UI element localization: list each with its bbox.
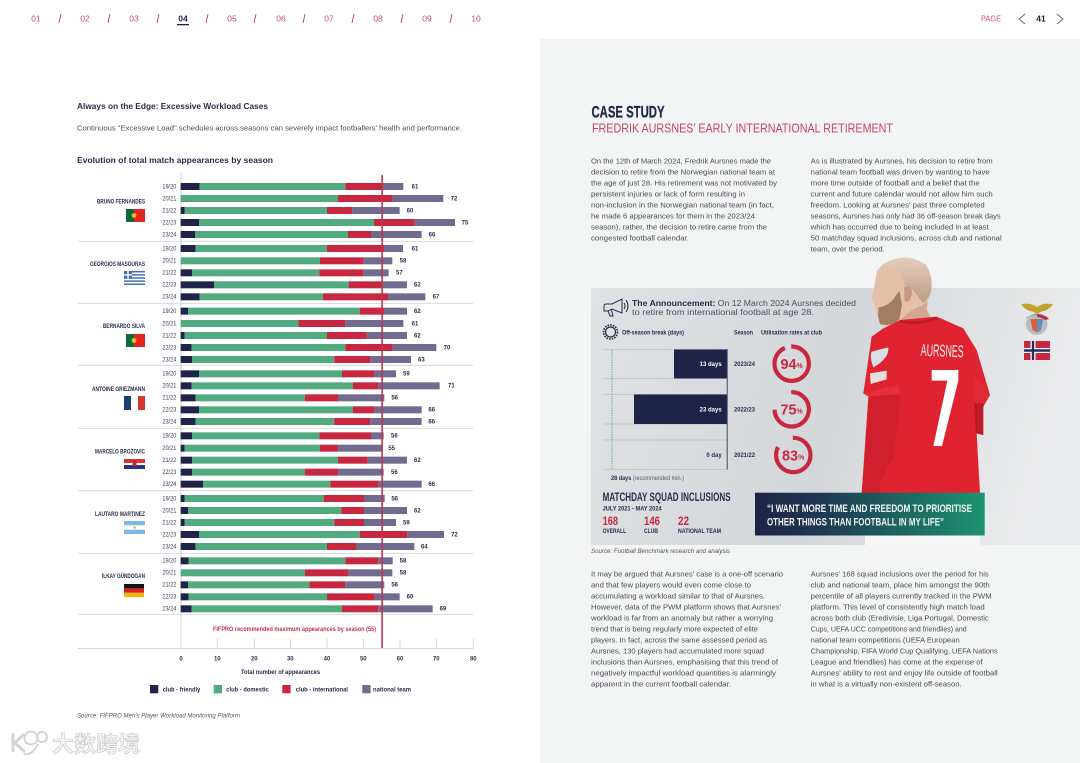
player bars: Lautaro Martinez: 62 bbox=[414, 508, 421, 514]
section navigation: 04 bbox=[178, 14, 188, 24]
player bars: Bernardo Silva: 63 bbox=[418, 357, 425, 363]
player bars: Marcelo Brozovic: 20/21 bbox=[162, 446, 177, 452]
text block: analysis column 1: trend that is being regularly more expected of elite bbox=[591, 625, 758, 634]
x axis labels: 80 bbox=[470, 656, 477, 662]
text block: analysis column 2: Aursnes' ability to rest and enjoy life outside of football bbox=[811, 669, 998, 678]
case study title: CASE STUDY bbox=[592, 103, 665, 122]
FIFPRO limit label: FIFPRO recommended maximum appearances by season (55) bbox=[213, 626, 376, 633]
announcement text: to retire from international football at age 28. bbox=[632, 307, 814, 317]
text block: intro column 1: decision to retire from the Norwegian national team at bbox=[591, 167, 775, 176]
player bars: Ilkay Gundogan: 23/24 bbox=[162, 607, 177, 613]
bars: all player seasons bbox=[162, 183, 469, 613]
player bars: Bruno Fernandes: 21/22 bbox=[162, 208, 177, 214]
player bars: Bruno Fernandes bbox=[162, 183, 469, 238]
player bars: Lautaro Martinez: 59 bbox=[403, 520, 410, 526]
text block: intro column 2: team, over the period. bbox=[811, 244, 885, 253]
bar chart: off-season break days: 13 days bbox=[700, 362, 722, 368]
player bars: Bernardo Silva: 22/23 bbox=[162, 345, 177, 351]
donut: 94% bbox=[774, 346, 809, 381]
player label: Ilkay Gundogan bbox=[102, 573, 145, 597]
player bars: Bernardo Silva: 62 bbox=[414, 309, 421, 315]
player bars: Bruno Fernandes: 60 bbox=[407, 208, 414, 214]
player bars: Marcelo Brozovic: 23/24 bbox=[162, 482, 177, 488]
text block: intro column 1: non-inclusion in the Norwegian national team (in fact, bbox=[591, 200, 774, 209]
watermark: 大数跨境 bbox=[52, 732, 140, 757]
player bars: Georgios Masouras: 61 bbox=[412, 246, 419, 252]
player bars: Antoine Griezmann: 56 bbox=[391, 396, 399, 402]
player label: Antoine Griezmann: ANTOINE GRIEZMANN bbox=[92, 387, 145, 393]
case study subtitle: FREDRIK AURSNES’ EARLY INTERNATIONAL RETIREMENT bbox=[592, 121, 893, 135]
player bars: Georgios Masouras: 22/23 bbox=[162, 283, 177, 289]
player bars: Lautaro Martinez: 56 bbox=[391, 496, 399, 502]
section navigation: 08 bbox=[373, 14, 383, 24]
legend: club - friendly bbox=[163, 686, 201, 693]
x axis labels: 40 bbox=[324, 656, 331, 662]
section navigation: 02 bbox=[80, 14, 90, 24]
player bars: Antoine Griezmann: 66 bbox=[428, 408, 436, 414]
donut: 83% bbox=[776, 438, 810, 472]
text block: intro column 1: season), rather, the decision to retire came from the bbox=[591, 222, 767, 231]
panel: the announcement bbox=[591, 258, 1080, 545]
panel: case study page background bbox=[540, 39, 1080, 763]
player bars: Lautaro Martinez: 22/23 bbox=[162, 532, 177, 538]
player bars: Georgios Masouras: 62 bbox=[414, 283, 421, 289]
text block: intro column 1: the age of just 28. His retirement was not motivated by bbox=[591, 178, 777, 187]
donut: 75%: % bbox=[796, 408, 804, 416]
player bars: Marcelo Brozovic: 21/22 bbox=[162, 458, 177, 464]
text block: analysis column 1: negatively impactful workload quantities is alarmingly bbox=[591, 669, 776, 678]
text block: analysis column 2: in what is a virtually non-existent off-season. bbox=[811, 680, 962, 689]
text block: intro column 2: current and future calendar would not allow him such bbox=[811, 189, 993, 198]
player label: Bruno Fernandes: BRUNO FERNANDES bbox=[97, 199, 145, 205]
player bars: Lautaro Martinez: 19/20 bbox=[162, 496, 177, 502]
player bars: Georgios Masouras: 20/21 bbox=[162, 259, 177, 265]
matchday squad inclusions: NATIONAL TEAM bbox=[678, 528, 721, 535]
legend: club - international bbox=[296, 686, 348, 693]
player label: Marcelo Brozovic: MARCELO BROZOVIC bbox=[95, 449, 146, 455]
recommended minimum note: 28 days (recommended min.) bbox=[611, 476, 684, 482]
text block: analysis column 1: Aursnes, 130 players had accumulated more squad bbox=[591, 647, 764, 656]
player label: Marcelo Brozovic bbox=[95, 449, 146, 469]
donut: 75%: 75 bbox=[780, 402, 796, 418]
text block: intro column 2: which has occurred due to being included in at least bbox=[810, 222, 989, 231]
player label: Bruno Fernandes bbox=[97, 199, 145, 222]
player bars: Ilkay Gundogan: 58 bbox=[400, 559, 407, 565]
player bars: Bruno Fernandes: 22/23 bbox=[162, 220, 177, 226]
text block: analysis column 1: However, data of the PWM platform shows that Aursnes' bbox=[591, 603, 782, 612]
text block: intro column 2: freedom. Looking at Aursnes' past three completed bbox=[811, 200, 985, 209]
player bars: Antoine Griezmann: 19/20 bbox=[162, 372, 177, 378]
x axis labels: 20 bbox=[251, 656, 258, 662]
matchday squad inclusions bbox=[603, 490, 731, 535]
donut: 75% bbox=[774, 392, 809, 426]
player bars: Bernardo Silva bbox=[162, 308, 451, 363]
text block: analysis column 1: workload is far from an anomaly but rather a worrying bbox=[590, 614, 773, 623]
matchday squad inclusions: JULY 2021 - MAY 2024 bbox=[603, 505, 662, 512]
donut: 83%: 83 bbox=[782, 448, 798, 464]
player bars: Ilkay Gundogan: 69 bbox=[440, 607, 447, 613]
page number bbox=[981, 14, 1063, 24]
player label: Bernardo Silva: BERNARDO SILVA bbox=[103, 324, 146, 330]
player bars: Lautaro Martinez: 64 bbox=[421, 544, 428, 550]
text block: intro column 2 bbox=[810, 156, 1002, 253]
column headers: Off-season break (days) bbox=[622, 330, 684, 336]
text block: intro column 2: As is illustrated by Aursnes, his decision to retire from bbox=[811, 156, 993, 165]
player bars: Marcelo Brozovic: 19/20 bbox=[162, 434, 177, 440]
player bars: Lautaro Martinez: 20/21 bbox=[162, 508, 177, 514]
matchday squad inclusions: 168 bbox=[603, 514, 618, 528]
player bars: Bernardo Silva: 20/21 bbox=[162, 321, 177, 327]
player bars: Bruno Fernandes: 19/20 bbox=[162, 184, 177, 190]
player label: Georgios Masouras bbox=[90, 262, 145, 285]
text block: analysis column 1: It may be argued that Aursnes' case is a one-off scenario bbox=[591, 570, 783, 579]
player bars: Georgios Masouras: 21/22 bbox=[162, 271, 177, 277]
text block: intro column 2: national team football was driven by wanting to have bbox=[811, 167, 990, 176]
section navigation: 03 bbox=[129, 14, 139, 24]
legend bbox=[150, 685, 411, 693]
player bars: Antoine Griezmann: 59 bbox=[403, 372, 410, 378]
player bars: Ilkay Gundogan: 56 bbox=[391, 583, 399, 589]
player bars: Georgios Masouras bbox=[162, 245, 440, 301]
text block: analysis column 1 bbox=[590, 570, 783, 689]
matchday squad inclusions: 22 bbox=[678, 514, 689, 528]
player bars: Ilkay Gundogan bbox=[162, 557, 447, 613]
text block: chart intro: Continuous "Excessive Load" schedules across seasons can severely impact footballers' health and performance. bbox=[77, 124, 462, 132]
section navigation: 05 bbox=[227, 14, 237, 24]
player bars: Antoine Griezmann bbox=[162, 370, 455, 425]
player bars: Antoine Griezmann: 20/21 bbox=[162, 384, 177, 390]
player bars: Marcelo Brozovic: 56 bbox=[391, 470, 398, 476]
x axis labels bbox=[179, 656, 477, 662]
player bars: Bernardo Silva: 19/20 bbox=[162, 309, 177, 315]
text block: analysis column 1: inclusions than Aursnes, emphasising that this trend of bbox=[591, 658, 778, 667]
player bars: Antoine Griezmann: 23/24 bbox=[162, 419, 177, 425]
quote callout: OTHER THINGS THAN FOOTBALL IN MY LIFE” bbox=[767, 516, 944, 528]
icon: Norway flag bbox=[1024, 341, 1050, 360]
player label: Antoine Griezmann bbox=[92, 387, 145, 410]
legend: national team bbox=[373, 686, 411, 693]
player bars: Georgios Masouras: 67 bbox=[433, 295, 440, 301]
player bars: Bruno Fernandes: 72 bbox=[451, 196, 458, 202]
text block: analysis column 2: percentile of all players currently tracked in the PWM bbox=[811, 592, 992, 601]
legend: club - domestic bbox=[226, 686, 269, 693]
player label: Georgios Masouras: GEORGIOS MASOURAS bbox=[90, 262, 145, 268]
bar chart: off-season break days: 0 day bbox=[706, 453, 722, 459]
player bars: Lautaro Martinez: 72 bbox=[451, 532, 458, 538]
player bars: Marcelo Brozovic: 66 bbox=[428, 482, 436, 488]
text block: analysis column 2: club and national team, place him amongst the 90th bbox=[811, 581, 990, 590]
x axis labels: 30 bbox=[287, 656, 294, 662]
section navigation: 01 bbox=[31, 14, 41, 24]
text block: intro column 1 bbox=[591, 156, 777, 242]
column headers bbox=[622, 330, 822, 336]
announcement text: The Announcement: On 12 March 2024 Aursnes decided bbox=[632, 298, 856, 308]
text block: analysis column 1: accumulating a workload similar to that of Aursnes. bbox=[591, 592, 765, 601]
player bars: Bruno Fernandes: 66 bbox=[429, 232, 436, 238]
icon: Benfica crest bbox=[1021, 304, 1053, 335]
source note: case study: Source: Football Benchmark research and analysis bbox=[591, 549, 730, 555]
player bars: Antoine Griezmann: 71 bbox=[448, 384, 455, 390]
player bars: Bernardo Silva: 23/24 bbox=[162, 357, 177, 363]
section navigation: 07 bbox=[324, 14, 334, 24]
quote callout bbox=[755, 493, 985, 536]
player bars: Ilkay Gundogan: 20/21 bbox=[162, 571, 177, 577]
donut: 94%: % bbox=[796, 363, 804, 370]
watermark bbox=[13, 732, 140, 757]
text block: analysis column 2 bbox=[811, 570, 998, 689]
column headers: Utilisation rates at club bbox=[761, 330, 822, 336]
player bars: Ilkay Gundogan: 19/20 bbox=[162, 559, 177, 565]
x axis labels: 70 bbox=[433, 656, 440, 662]
matchday squad inclusions: CLUB bbox=[644, 528, 658, 535]
player bars: Georgios Masouras: 57 bbox=[396, 271, 403, 277]
section navigation bbox=[31, 14, 481, 25]
x axis labels: 0 bbox=[179, 656, 183, 662]
player bars: Antoine Griezmann: 66 bbox=[428, 419, 436, 425]
text block: analysis column 2: League and friendlies) has come at the expense of bbox=[811, 658, 983, 667]
player bars: Bruno Fernandes: 23/24 bbox=[162, 232, 177, 238]
page number: 41 bbox=[1036, 14, 1046, 24]
player label: Lautaro Martinez bbox=[95, 512, 145, 534]
text block: intro column 1: congested football calendar. bbox=[591, 233, 689, 242]
bar chart: off-season break days bbox=[603, 349, 727, 470]
x axis title: Total number of appearances bbox=[241, 669, 321, 676]
heading: excessive workload cases: Always on the Edge: Excessive Workload Cases bbox=[77, 101, 268, 111]
text block: analysis column 2: Aursnes' 168 squad inclusions over the period for his bbox=[811, 570, 989, 579]
source note: chart: Source: FIFPRO Men's Player Workload Monitoring Platform bbox=[77, 714, 240, 720]
x axis labels: 60 bbox=[397, 656, 404, 662]
player bars: Bernardo Silva: 70 bbox=[444, 345, 451, 351]
text block: intro column 2: more time outside of football and a belief that the bbox=[811, 178, 980, 187]
text block: analysis column 2: national team competitions (UEFA European bbox=[811, 636, 960, 645]
player bars: Marcelo Brozovic: 62 bbox=[414, 458, 421, 464]
text block: analysis column 1: players. In fact, across the same assessed period as bbox=[591, 636, 767, 645]
player bars: Ilkay Gundogan: 21/22 bbox=[162, 583, 177, 589]
text block: analysis column 1: apparent in the current football calendar. bbox=[591, 680, 731, 689]
player bars: Ilkay Gundogan: 60 bbox=[407, 595, 414, 601]
player bars: Lautaro Martinez: 23/24 bbox=[162, 544, 177, 550]
bar chart: off-season break days: 23 days bbox=[700, 407, 722, 413]
donut: 94%: 94 bbox=[780, 357, 796, 373]
text block: analysis column 2: Cups, UEFA UCC competitions and friendlies) and bbox=[811, 625, 967, 634]
player bars: Bernardo Silva: 62 bbox=[414, 333, 421, 339]
player label: Bernardo Silva bbox=[103, 324, 146, 347]
quote callout: “I WANT MORE TIME AND FREEDOM TO PRIORITISE bbox=[767, 503, 972, 515]
text block: analysis column 2: across both club (Eredivisie, Liga Portugal, Domestic bbox=[811, 614, 989, 623]
player bars: Bruno Fernandes: 61 bbox=[412, 184, 419, 190]
text block: intro column 1: On the 12th of March 2024, Fredrik Aursnes made the bbox=[591, 156, 771, 165]
player bars: Marcelo Brozovic: 55 bbox=[388, 446, 396, 452]
text block: intro column 2: 50 matchday squad inclusions, across club and national bbox=[811, 233, 1002, 242]
text block: intro column 2: seasons, Aursnes has only had 36 off-season break days bbox=[811, 211, 1001, 220]
photo: player in red Norway shirt bbox=[862, 258, 990, 545]
text block: analysis column 2: platform. This level of consistently high match load bbox=[811, 603, 985, 612]
player bars: Antoine Griezmann: 21/22 bbox=[162, 396, 177, 402]
matchday squad inclusions: OVERALL bbox=[603, 528, 626, 535]
player bars: Bruno Fernandes: 75 bbox=[462, 220, 469, 226]
stacked bar chart: appearances by season bbox=[78, 172, 477, 676]
player bars: Lautaro Martinez bbox=[162, 495, 458, 550]
donut: 83%: % bbox=[798, 454, 805, 461]
icon: gear bbox=[604, 325, 618, 339]
matchday squad inclusions: MATCHDAY SQUAD INCLUSIONS bbox=[603, 490, 731, 504]
player bars: Ilkay Gundogan: 22/23 bbox=[162, 595, 177, 601]
player bars: Bruno Fernandes: 20/21 bbox=[162, 196, 177, 202]
player bars: Ilkay Gundogan: 58 bbox=[400, 571, 407, 577]
player label: Ilkay Gundogan: ILKAY GÜNDOGAN bbox=[102, 573, 145, 580]
matchday squad inclusions: 146 bbox=[644, 514, 660, 528]
shirt name: AURSNES bbox=[920, 341, 964, 361]
player bars: Georgios Masouras: 58 bbox=[400, 259, 407, 265]
player label: Lautaro Martinez: LAUTARO MARTINEZ bbox=[95, 512, 145, 518]
player bars: Marcelo Brozovic bbox=[162, 432, 436, 488]
player bars: Marcelo Brozovic: 22/23 bbox=[162, 470, 177, 476]
player bars: Antoine Griezmann: 22/23 bbox=[162, 408, 177, 414]
x axis labels: 50 bbox=[360, 656, 367, 662]
section navigation: 06 bbox=[276, 14, 286, 24]
player bars: Georgios Masouras: 19/20 bbox=[162, 246, 177, 252]
text block: intro column 1: he made 6 appearances for them in the 2023/24 bbox=[591, 211, 755, 220]
season labels: 2021/22 bbox=[734, 453, 756, 459]
player bars: Marcelo Brozovic: 56 bbox=[391, 434, 398, 440]
player bars: Georgios Masouras: 23/24 bbox=[162, 295, 177, 301]
season labels: 2023/24 bbox=[734, 362, 756, 368]
player bars: Bernardo Silva: 21/22 bbox=[162, 333, 177, 339]
x axis labels: 10 bbox=[214, 656, 221, 662]
text block: analysis column 2: Championship, FIFA World Cup Qualifying, UEFA Nations bbox=[811, 647, 998, 656]
announcement text bbox=[632, 298, 856, 317]
text block: intro column 1: persistent injuries or lack of form resulting in bbox=[591, 189, 745, 198]
season labels bbox=[734, 362, 756, 459]
player bars: Lautaro Martinez: 21/22 bbox=[162, 520, 177, 526]
text block: analysis column 1: and that few players would even come close to bbox=[591, 581, 751, 590]
season labels: 2022/23 bbox=[734, 407, 756, 413]
FIFPRO limit line at 55 bbox=[381, 175, 383, 648]
chart title: Evolution of total match appearances by season bbox=[77, 155, 273, 165]
column headers: Season bbox=[734, 330, 753, 336]
icon: megaphone bbox=[604, 299, 628, 316]
page number: PAGE bbox=[981, 14, 1001, 24]
player bars: Bernardo Silva: 61 bbox=[412, 321, 419, 327]
section navigation: 09 bbox=[422, 14, 432, 24]
section navigation: 10 bbox=[471, 14, 481, 24]
